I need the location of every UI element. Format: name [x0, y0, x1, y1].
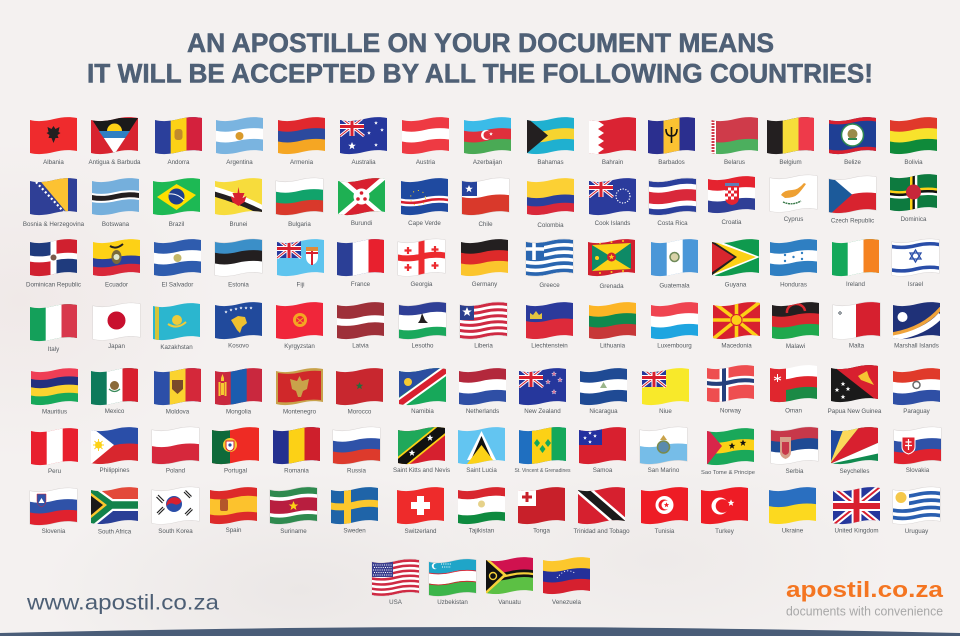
flag: Paraguay	[891, 374, 942, 415]
flag: Brunei	[215, 178, 262, 226]
flag: Papua New Guinea: Papua New Guinea	[828, 408, 882, 415]
flag: Tonga	[517, 485, 566, 534]
flag: Mexico	[90, 366, 140, 415]
flag: Austria	[400, 123, 451, 166]
flag: Armenia: Armenia	[290, 159, 314, 166]
flag: Tunisia: Tunisia	[655, 528, 675, 535]
flag: Cook Islands	[589, 178, 636, 225]
brand logo: apostil.co.za	[786, 577, 944, 602]
flag: Belgium	[766, 115, 816, 166]
flag: Luxembourg: Luxembourg	[657, 342, 692, 350]
flag: Sao Tome & Principe: Sao Tome & Principe	[701, 470, 755, 476]
flag: Slovakia: Slovakia	[906, 467, 930, 474]
flag: Kosovo: Kosovo	[228, 342, 249, 350]
flag: Montenegro: Montenegro	[283, 408, 317, 416]
flag: Mauritius: Mauritius	[42, 408, 67, 416]
flag: Bahrain: Bahrain	[602, 159, 624, 166]
flag: Marshall Islands: Marshall Islands	[894, 342, 939, 350]
flag: Ecuador: Ecuador	[105, 282, 128, 288]
flag: Germany: Germany	[472, 281, 498, 288]
flag: Sweden: Sweden	[343, 528, 366, 534]
flag: Lithuania	[587, 308, 638, 350]
flag: Belize	[829, 117, 876, 164]
flag: Belgium: Belgium	[779, 159, 802, 166]
flag: Cyprus	[769, 173, 818, 223]
flag: Venezuela: Venezuela	[552, 599, 582, 606]
flag: Kosovo	[214, 300, 263, 350]
flag: St. Vincent & Grenadines	[514, 425, 571, 474]
flag: Vanuatu	[484, 556, 535, 606]
flag: Dominica: Dominica	[901, 216, 927, 223]
flag: Costa Rica	[648, 178, 696, 225]
title: IT WILL BE ACCEPTED BY ALL THE FOLLOWING COUNTRIES!	[87, 58, 873, 88]
flag: Portugal: Portugal	[224, 468, 247, 474]
flag: Israel: Israel	[908, 281, 923, 288]
flag: Poland	[150, 427, 201, 474]
flag: Botswana: Botswana	[102, 221, 130, 228]
flag: Luxembourg	[649, 308, 700, 350]
flag: Guyana	[711, 237, 760, 288]
flag: Suriname: Suriname	[280, 528, 307, 535]
flag: Mongolia	[214, 366, 263, 416]
flag: Argentina	[214, 123, 265, 166]
flag: Malawi	[770, 304, 821, 350]
flag: Bahamas: Bahamas	[537, 159, 564, 166]
flag: Niue: Niue	[659, 408, 672, 415]
flag: Samoa: Samoa	[593, 467, 613, 474]
flag: Cook Islands: Cook Islands	[595, 220, 630, 227]
flag: Switzerland	[396, 485, 445, 535]
flag: Ireland: Ireland	[846, 281, 866, 288]
flag: Lesotho: Lesotho	[411, 342, 434, 350]
flag: Turkey: Turkey	[715, 528, 735, 535]
flag: Sweden	[329, 485, 380, 534]
flag: Latvia: Latvia	[352, 342, 369, 350]
flag: South Korea	[151, 485, 200, 535]
flag: Belize: Belize	[844, 159, 861, 166]
flag: St. Vincent & Grenadines: St. Vincent & Grenadines	[514, 468, 571, 474]
flag: Ecuador	[91, 244, 142, 288]
flag: Ukraine	[767, 495, 818, 534]
website url: www.apostil.co.za	[26, 592, 219, 614]
flag: Liechtenstein	[524, 310, 575, 350]
flag: Liberia	[458, 300, 509, 350]
flag: Kyrgyzstan	[275, 300, 324, 350]
flag: Andorra: Andorra	[167, 159, 190, 166]
flag: Netherlands: Netherlands	[466, 408, 499, 415]
flag: Honduras	[768, 245, 819, 288]
flag: El Salvador: El Salvador	[162, 282, 193, 288]
flag: Vanuatu: Vanuatu	[498, 599, 521, 606]
flag: Malawi: Malawi	[786, 343, 805, 350]
flag: Norway	[705, 363, 756, 414]
flag: Liechtenstein: Liechtenstein	[531, 342, 568, 350]
brand logo	[786, 577, 944, 618]
flag: Serbia: Serbia	[786, 468, 804, 475]
flag: Nicaragua	[578, 374, 629, 415]
flag: Chile	[462, 178, 510, 226]
flag: Mongolia: Mongolia	[226, 408, 252, 416]
flag: Philippines	[89, 426, 140, 474]
flag: Cyprus: Cyprus	[784, 216, 803, 223]
flag: Saint Lucia	[457, 425, 506, 474]
flag: Israel	[890, 237, 941, 288]
flag: Spain: Spain	[226, 527, 242, 534]
flag: Antigua & Barbuda: Antigua & Barbuda	[89, 159, 141, 166]
flag: Czech Republic	[827, 174, 878, 224]
flag: Greece	[526, 238, 574, 287]
flag: Burundi: Burundi	[351, 220, 372, 227]
flag: Czech Republic: Czech Republic	[831, 218, 874, 224]
flag: Tajikistan: Tajikistan	[469, 528, 495, 534]
flag: Cape Verde: Cape Verde	[408, 220, 441, 227]
flag: Bahrain	[589, 117, 636, 164]
flag: United Kingdom: United Kingdom	[834, 528, 879, 534]
flag: South Korea: South Korea	[158, 528, 193, 535]
flag: Romania	[272, 425, 322, 474]
flag: Grenada: Grenada	[599, 283, 624, 290]
flag: Seychelles: Seychelles	[840, 468, 869, 475]
flag: Turkey	[700, 485, 749, 535]
flag: Oman: Oman	[785, 408, 802, 414]
flag: Macedonia	[711, 300, 762, 350]
flag: Dominican Republic	[26, 237, 81, 288]
flag: Bahamas	[527, 117, 574, 164]
flag: Japan	[92, 301, 141, 350]
flag: Nicaragua: Nicaragua	[589, 408, 618, 415]
flag: El Salvador	[152, 245, 203, 288]
flag: Argentina: Argentina	[226, 159, 253, 166]
flag: Kazakhstan: Kazakhstan	[160, 344, 193, 351]
flag: Portugal	[211, 425, 260, 474]
flag: Georgia	[396, 237, 447, 288]
flag: Norway: Norway	[720, 408, 742, 414]
flag: New Zealand: New Zealand	[524, 408, 561, 415]
flag: Paraguay: Paraguay	[903, 408, 931, 415]
flag: San Marino	[638, 427, 689, 474]
footer band	[0, 627, 960, 636]
flag: Trinidad and Tobago: Trinidad and Tobago	[573, 528, 630, 535]
brand logo: documents with convenience	[786, 604, 943, 618]
flag: Italy: Italy	[48, 346, 60, 353]
flag: Colombia: Colombia	[537, 222, 564, 229]
flag: Malta	[832, 300, 881, 350]
flag: Venezuela	[541, 563, 592, 606]
flag: Guatemala	[650, 237, 699, 290]
flag: Seychelles	[830, 425, 880, 475]
title: AN APOSTILLE ON YOUR DOCUMENT MEANS	[187, 28, 774, 58]
flag: Fiji: Fiji	[297, 282, 304, 288]
flag: Slovenia: Slovenia	[42, 528, 66, 535]
flag: Latvia	[335, 300, 386, 350]
flag: Slovenia	[28, 488, 79, 535]
flag: Macedonia: Macedonia	[721, 342, 752, 350]
flag: San Marino: San Marino	[648, 467, 680, 474]
flag: Slovakia	[892, 427, 943, 474]
flag: Albania	[30, 117, 77, 164]
flag: Russia: Russia	[347, 468, 367, 474]
flag: United Kingdom	[833, 487, 880, 534]
flag: Saint Lucia: Saint Lucia	[466, 467, 497, 474]
flag: Albania: Albania	[43, 159, 64, 166]
flag: Moldova: Moldova	[166, 408, 190, 416]
flag: South Africa	[89, 490, 140, 536]
flag: Mexico: Mexico	[105, 408, 125, 415]
flag: Ireland	[831, 237, 880, 288]
flag: Croatia	[706, 182, 757, 226]
flag: Malta: Malta	[849, 342, 865, 350]
flag: Barbados: Barbados	[658, 159, 685, 166]
flag: France	[337, 239, 384, 286]
flag: Bosnia & Herzegovina: Bosnia & Herzegovina	[23, 221, 85, 228]
flag: Spain	[208, 491, 259, 534]
flag: Antigua & Barbuda	[89, 115, 141, 166]
flag: Barbados	[648, 117, 695, 164]
flag: Croatia: Croatia	[722, 219, 742, 226]
flag: Bolivia: Bolivia	[904, 159, 923, 166]
flag: Namibia	[398, 366, 447, 415]
flag: Oman	[768, 363, 819, 414]
flag: Ukraine: Ukraine	[782, 528, 804, 534]
flag: Lesotho	[397, 302, 448, 350]
flag: Peru	[30, 426, 79, 475]
flag: Mauritius	[29, 372, 80, 416]
flag: Saint Kitts and Nevis	[393, 425, 450, 474]
flag: Andorra	[155, 117, 202, 164]
flag: Russia	[331, 427, 382, 474]
flag: Poland: Poland	[166, 468, 186, 474]
flag: Guyana: Guyana	[725, 282, 747, 288]
flag: Belarus: Belarus	[724, 159, 745, 166]
flag: Liberia: Liberia	[474, 342, 493, 350]
title	[87, 28, 873, 88]
flag: Estonia: Estonia	[228, 282, 249, 288]
flag: Brazil: Brazil	[169, 221, 184, 228]
flag: Switzerland: Switzerland	[405, 528, 437, 535]
flag: Saint Kitts and Nevis: Saint Kitts and Nevis	[393, 467, 450, 474]
flag: Kazakhstan	[152, 301, 201, 351]
flag: France: France	[351, 281, 371, 288]
flag: USA: USA	[389, 599, 403, 606]
flag: Italy	[29, 302, 78, 353]
flag: Kyrgyzstan: Kyrgyzstan	[284, 343, 315, 350]
flag: Guatemala: Guatemala	[659, 282, 690, 290]
flag: Bulgaria: Bulgaria	[288, 221, 311, 228]
flag: Bosnia & Herzegovina	[23, 176, 85, 228]
flag: Brazil	[153, 178, 200, 226]
flag: Greece: Greece	[539, 282, 560, 289]
flag: Sao Tome & Principe	[701, 427, 756, 476]
flag: Azerbaijan	[462, 123, 513, 166]
flag: Dominican Republic: Dominican Republic	[26, 282, 81, 288]
flag: Chile: Chile	[478, 221, 493, 228]
flag grid	[23, 115, 943, 606]
flag: Serbia	[769, 427, 820, 475]
flag: Trinidad and Tobago	[573, 485, 630, 535]
flag: Uruguay: Uruguay	[905, 528, 929, 535]
flag: Bulgaria	[274, 178, 325, 228]
flag: Moldova	[153, 366, 202, 416]
flag: Dominica	[890, 174, 937, 221]
flag: Brunei: Brunei	[230, 221, 247, 228]
flag: Suriname	[268, 485, 319, 535]
flag: Tunisia	[640, 485, 689, 535]
flag: Costa Rica: Costa Rica	[657, 220, 688, 227]
flag: Marshall Islands	[892, 300, 941, 350]
flag: Georgia: Georgia	[410, 281, 433, 288]
flag: Austria: Austria	[416, 159, 436, 166]
flag: Burundi	[338, 178, 385, 225]
flag: Uzbekistan	[427, 559, 478, 606]
flag: Niue	[641, 366, 690, 415]
flag: Cape Verde	[401, 178, 448, 226]
flag: Morocco: Morocco	[348, 408, 372, 416]
flag: Papua New Guinea	[828, 363, 882, 415]
flag: Fiji	[276, 237, 325, 288]
flag: New Zealand	[518, 366, 567, 415]
flag: Grenada	[587, 237, 636, 290]
flag: Morocco	[335, 366, 384, 416]
flag: Namibia: Namibia	[411, 408, 434, 415]
flag: Australia	[340, 117, 387, 164]
flag: Montenegro	[275, 366, 324, 416]
flag: Bolivia	[888, 123, 939, 166]
flag: Tajikistan	[456, 491, 507, 534]
flag: Australia: Australia	[351, 159, 376, 166]
flag: Estonia	[213, 239, 264, 288]
flag: Honduras: Honduras	[780, 282, 807, 288]
flag: Peru: Peru	[48, 468, 62, 475]
flag: Uruguay	[891, 485, 942, 535]
flag: Philippines: Philippines	[100, 467, 129, 474]
flag: South Africa: South Africa	[98, 528, 132, 536]
flag: Botswana	[92, 178, 139, 226]
flag: Uzbekistan: Uzbekistan	[437, 599, 468, 606]
flag: Netherlands	[457, 374, 508, 415]
flag: Romania: Romania	[284, 468, 309, 474]
flag: Samoa	[578, 425, 627, 474]
flag: Armenia	[276, 123, 327, 166]
flag: USA	[370, 557, 421, 606]
flag: Azerbaijan: Azerbaijan	[473, 159, 503, 166]
flag: Germany	[459, 245, 510, 288]
flag: Tonga: Tonga	[533, 528, 550, 534]
flag: Colombia	[525, 186, 576, 229]
flag: Japan: Japan	[108, 343, 125, 350]
flag: Belarus	[711, 117, 758, 164]
flag: Lithuania: Lithuania	[600, 342, 626, 350]
